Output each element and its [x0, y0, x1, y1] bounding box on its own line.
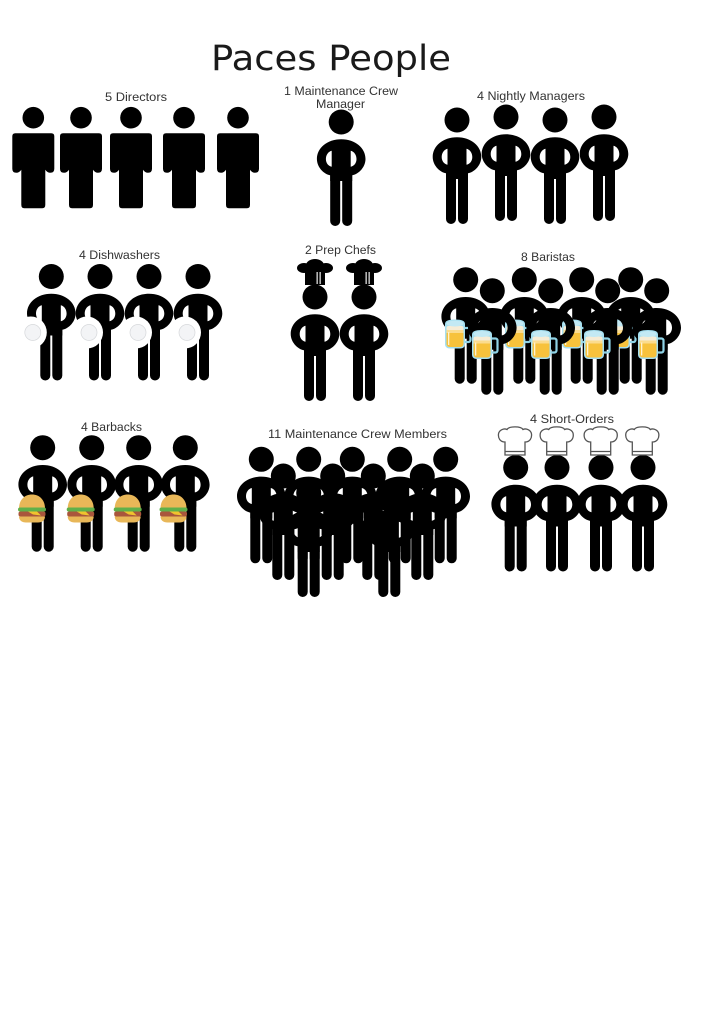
icon group: dishwashers with plates — [15, 264, 222, 380]
heading: maintenance crew manager: Manager — [316, 97, 365, 111]
icon group: short-orders with white hats — [491, 427, 667, 572]
icon group: nightly managers — [433, 104, 628, 224]
icon group: directors — [12, 107, 259, 208]
icon group: barbacks with burgers — [18, 435, 210, 552]
heading: barbacks: 4 Barbacks — [81, 420, 142, 434]
icon group: prep chefs with black hats — [291, 259, 388, 401]
icon group: baristas with beer mugs — [441, 267, 681, 395]
heading: 5 Directors: 5 Directors — [105, 90, 167, 104]
title: Paces People — [211, 39, 451, 79]
icon: maintenance crew manager — [317, 110, 366, 226]
icon group: maintenance crew members — [237, 447, 470, 597]
heading: maintenance crew manager: 1 Maintenance Crew — [284, 84, 398, 98]
heading: prep chefs: 2 Prep Chefs — [305, 243, 376, 257]
heading: short-orders: 4 Short-Orders — [530, 412, 614, 426]
heading: dishwashers: 4 Dishwashers — [79, 248, 160, 262]
heading: maintenance crew members: 11 Maintenance Crew Members — [268, 427, 447, 441]
heading: nightly managers: 4 Nightly Managers — [477, 89, 585, 103]
heading: baristas: 8 Baristas — [521, 250, 575, 264]
